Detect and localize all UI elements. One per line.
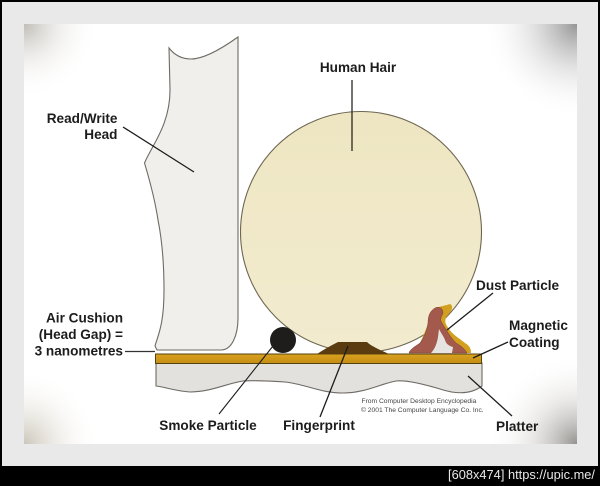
- watermark: [608x474] https://upic.me/: [448, 467, 595, 482]
- leader: air cushion: [125, 350, 155, 352]
- dust light gap: [431, 329, 453, 353]
- credit: © 2001 The Computer Language Co. Inc.: [361, 406, 484, 414]
- read/write head: [144, 37, 238, 350]
- magnetic coating: [156, 354, 482, 364]
- human hair circle: [240, 112, 482, 352]
- platter: [156, 363, 482, 393]
- label: human hair: Human Hair: [320, 60, 397, 75]
- label: read/write head: Read/Write: [47, 111, 118, 126]
- label: platter: Platter: [496, 419, 539, 434]
- diagram background: [24, 24, 577, 444]
- label: fingerprint: Fingerprint: [283, 418, 355, 433]
- label: magnetic coating: Coating: [509, 335, 560, 350]
- leader: platter: [468, 376, 512, 416]
- label: air cushion: (Head Gap) =: [39, 327, 123, 342]
- leader: human hair: [351, 80, 353, 151]
- dust body: [409, 307, 467, 353]
- leader: fingerprint: [320, 346, 348, 417]
- leader: magnetic coating: [473, 342, 508, 358]
- label: air cushion: Air Cushion: [46, 310, 123, 326]
- credit: From Computer Desktop Encyclopedia: [362, 398, 476, 405]
- leader: read/write head: [123, 127, 194, 172]
- label: dust particle: Dust Particle: [476, 278, 560, 293]
- label: magnetic coating: Magnetic: [509, 318, 568, 333]
- smoke particle: [270, 327, 296, 353]
- leader: smoke particle: [219, 346, 273, 414]
- fingerprint: [317, 342, 389, 354]
- dust particle: [409, 304, 471, 353]
- dust coating layer: [419, 304, 471, 353]
- label: smoke particle: Smoke Particle: [159, 418, 257, 433]
- label: read/write head: Head: [84, 127, 118, 142]
- label: air cushion: 3 nanometres: [35, 344, 123, 358]
- leader: dust particle: [447, 293, 493, 330]
